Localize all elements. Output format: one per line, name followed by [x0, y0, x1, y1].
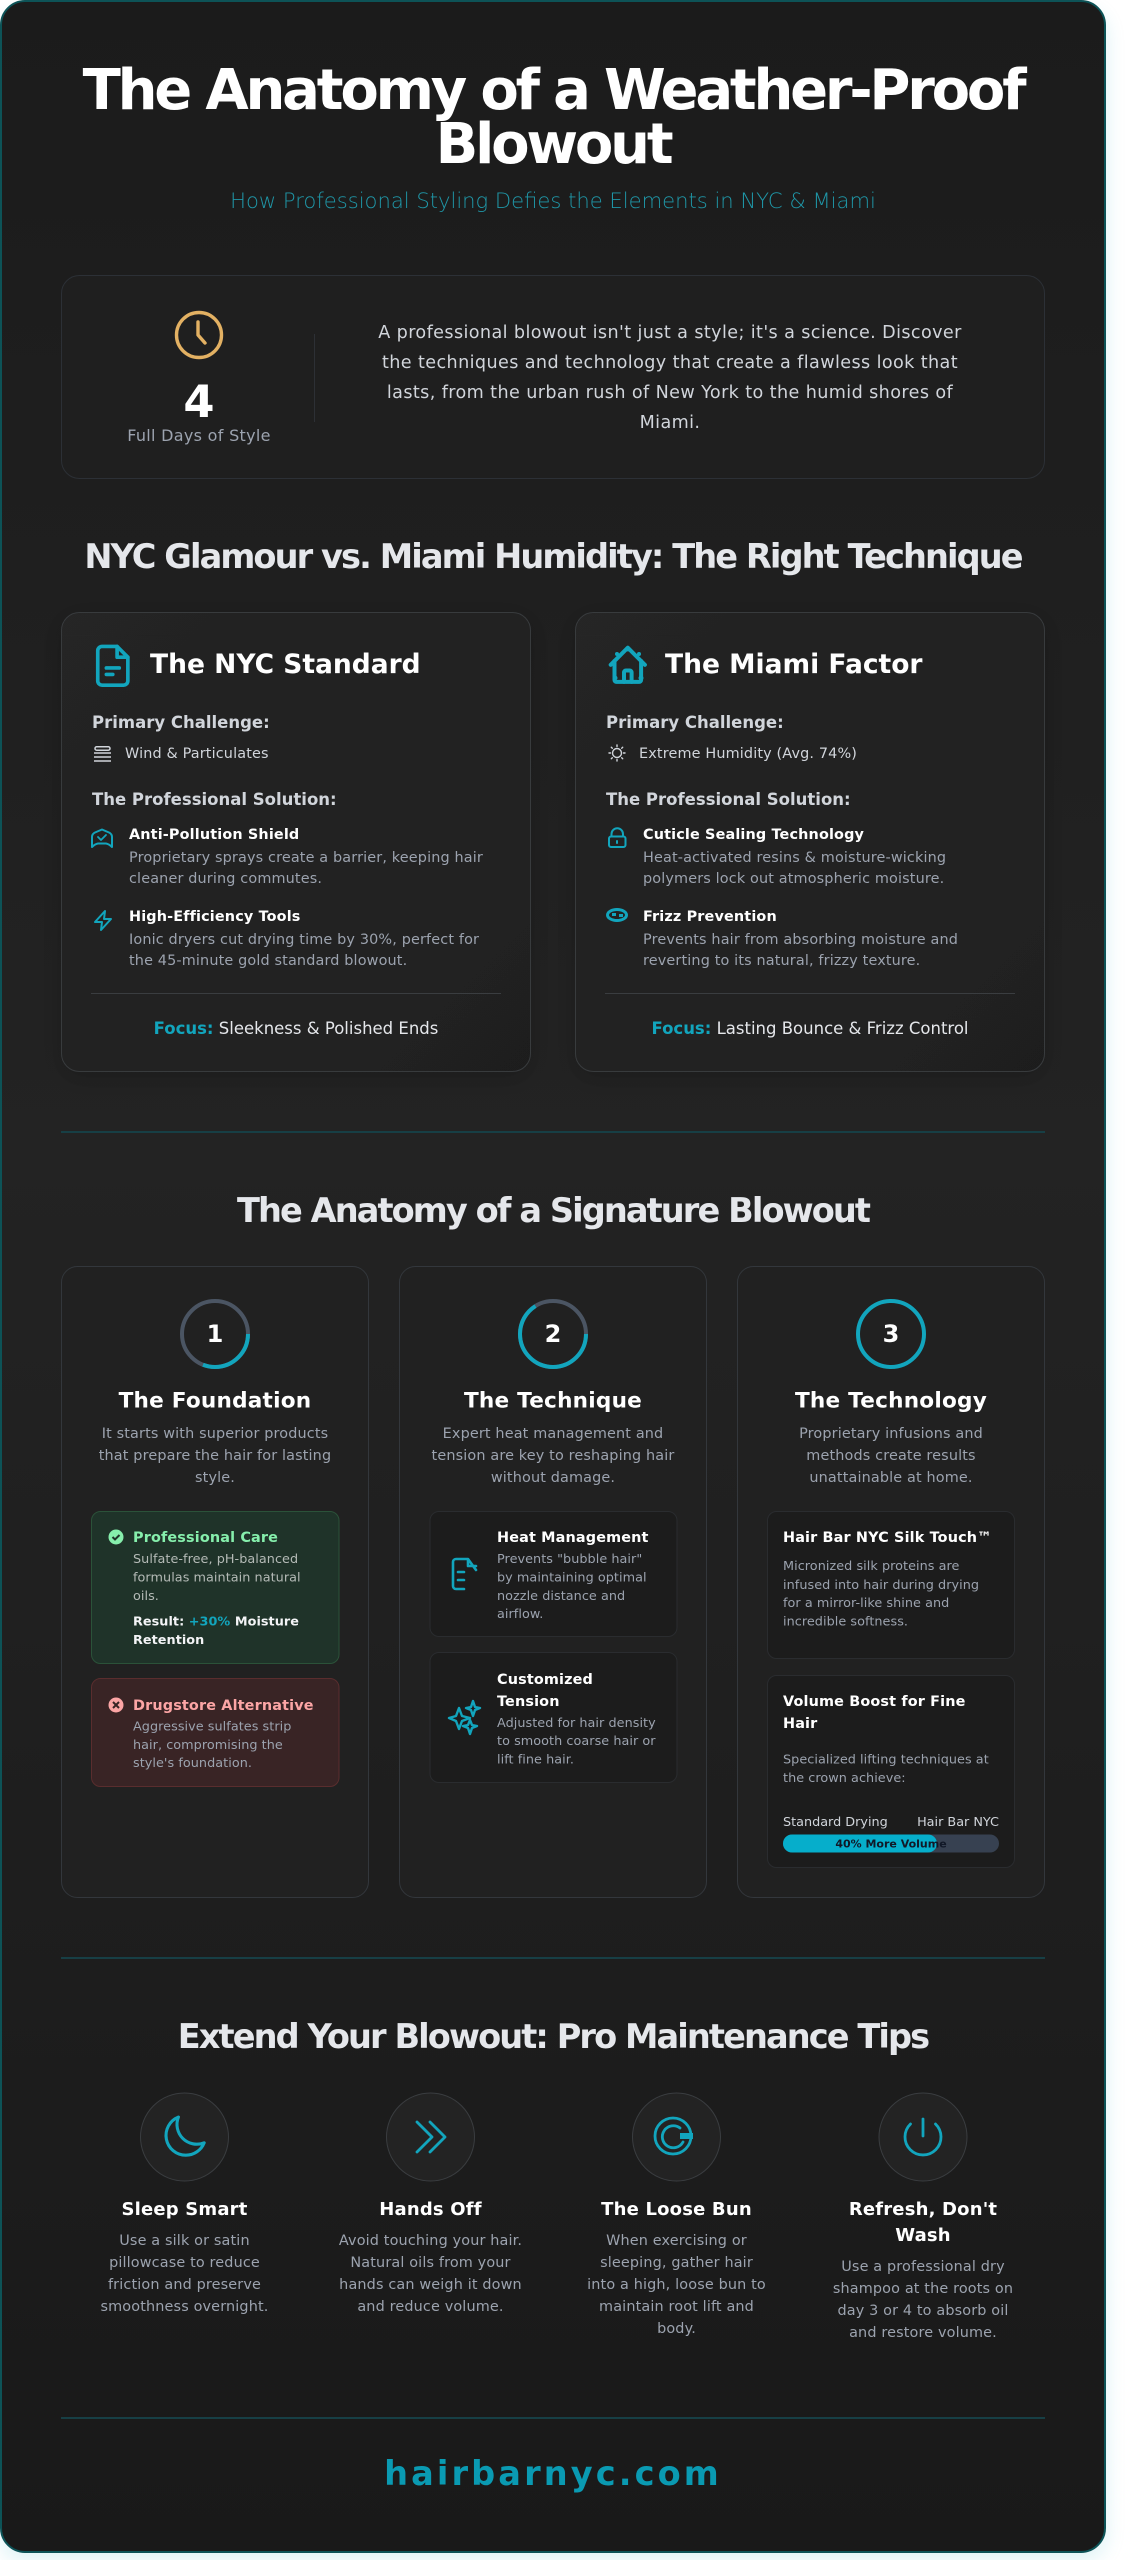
heat management box	[430, 1512, 677, 1636]
step ring 3	[858, 1301, 924, 1367]
tip: loose bun	[587, 2093, 766, 2337]
customized tension box: to smooth coarse hair or	[497, 1734, 656, 1749]
silk touch box	[768, 1512, 1014, 1658]
professional care box: oils.	[133, 1589, 159, 1604]
icon: bun	[632, 2093, 720, 2181]
step description: Expert heat management and	[443, 1426, 663, 1442]
solution: frizz prevention	[608, 909, 958, 969]
stat number: 4	[183, 375, 215, 428]
solution: frizz prevention: Frizz Prevention	[643, 909, 777, 925]
step ring 3: 3	[883, 1320, 899, 1348]
panel: Miami factor	[576, 612, 1044, 1072]
panel: intro stat	[62, 276, 1044, 478]
professional care box: Retention	[133, 1633, 204, 1648]
focus: Focus: Sleekness & Polished Ends	[154, 1019, 438, 1038]
solution label: The Professional Solution:	[606, 790, 851, 809]
step description: that prepare the hair for lasting	[99, 1448, 331, 1464]
solution: cuticle sealing	[609, 827, 946, 887]
tip: hands off: and reduce volume.	[357, 2299, 504, 2315]
icon: sparkles	[449, 1701, 480, 1734]
tip: loose bun: When exercising or	[606, 2233, 747, 2249]
tip: sleep smart	[100, 2093, 269, 2315]
solution: frizz prevention: Prevents hair from absorbing moisture and	[643, 932, 958, 948]
silk touch box: Micronized silk proteins are	[783, 1559, 960, 1574]
solution: anti-pollution shield	[92, 827, 483, 887]
solution: high-efficiency tools: the 45-minute gold standard blowout.	[129, 953, 407, 969]
volume bar	[783, 1834, 999, 1852]
solution: cuticle sealing: polymers lock out atmospheric moisture.	[643, 871, 944, 887]
icon: clock	[176, 312, 222, 358]
tip: hands off	[339, 2093, 522, 2315]
tip: loose bun: sleeping, gather hair	[600, 2255, 753, 2271]
focus: Focus: Lasting Bounce & Frizz Control	[651, 1019, 969, 1038]
intro text: A professional blowout isn't just a style; it's a science. Discover	[378, 323, 962, 343]
tip: sleep smart: friction and preserve	[108, 2277, 261, 2293]
solution label: The Professional Solution:	[92, 790, 337, 809]
icon: wind	[94, 747, 111, 761]
solution: cuticle sealing: Heat-activated resins & moisture-wicking	[643, 850, 946, 866]
step title: The Technology	[795, 1388, 987, 1414]
challenge text: Wind & Particulates	[125, 746, 269, 762]
step title: The Foundation	[119, 1388, 311, 1414]
professional care box: Professional Care	[133, 1530, 278, 1546]
customized tension box	[430, 1652, 677, 1782]
customized tension box: Customized	[497, 1672, 593, 1688]
tip: loose bun: body.	[657, 2321, 696, 2337]
step ring 1	[182, 1301, 248, 1367]
drugstore alternative box: Drugstore Alternative	[133, 1698, 314, 1714]
bar labels: Hair Bar NYC	[917, 1815, 999, 1830]
icon: moon	[140, 2093, 228, 2181]
volume boost box	[768, 1676, 1014, 1868]
drugstore alternative box: Aggressive sulfates strip	[133, 1720, 291, 1734]
professional care box: formulas maintain natural	[133, 1570, 301, 1586]
challenge label: Primary Challenge:	[606, 713, 784, 732]
silk touch box: infused into hair during drying	[783, 1578, 979, 1593]
tip: refresh	[833, 2093, 1013, 2341]
heat management box: Heat Management	[497, 1530, 649, 1546]
step description: without damage.	[491, 1470, 615, 1486]
step ring 1: 1	[207, 1320, 223, 1348]
panel: NYC standard	[62, 612, 530, 1072]
step description: unattainable at home.	[809, 1470, 973, 1486]
drugstore alternative box: style's foundation.	[133, 1756, 252, 1771]
tip: sleep smart: smoothness overnight.	[100, 2299, 269, 2315]
solution: anti-pollution shield: Anti-Pollution Shield	[129, 827, 299, 843]
tip: sleep smart: Sleep Smart	[121, 2199, 248, 2220]
icon: heat document	[453, 1559, 476, 1589]
step description: style.	[195, 1470, 235, 1486]
step description	[99, 1426, 331, 1486]
icon: house	[611, 646, 645, 682]
drugstore alternative box	[92, 1678, 339, 1786]
icon: power	[879, 2093, 967, 2181]
tip: refresh: day 3 or 4 to absorb oil	[837, 2303, 1009, 2319]
intro text: lasts, from the urban rush of New York to the humid shores of	[387, 383, 954, 403]
panel: step 3 technology	[738, 1266, 1044, 1898]
solution: high-efficiency tools: Ionic dryers cut drying time by 30%, perfect for	[129, 932, 479, 948]
solution: anti-pollution shield: Proprietary sprays create a barrier, keeping hair	[129, 850, 483, 866]
icon: sun	[609, 745, 625, 761]
tip: hands off: Hands Off	[379, 2199, 482, 2220]
solution: cuticle sealing: Cuticle Sealing Technology	[643, 827, 865, 843]
challenge text: Extreme Humidity (Avg. 74%)	[639, 746, 857, 762]
footer: website: hairbarnyc.com	[384, 2454, 722, 2493]
panel: step 1 foundation	[62, 1266, 368, 1898]
volume bar: 40% More Volume	[835, 1838, 947, 1850]
tip: refresh: Wash	[895, 2225, 951, 2246]
volume boost box: the crown achieve:	[783, 1771, 906, 1786]
subtitle: How Professional Styling Defies the Elements in NYC & Miami	[230, 188, 876, 213]
icon: check	[108, 1530, 124, 1544]
solution: frizz prevention: reverting to its natural, frizzy texture.	[643, 953, 920, 969]
silk touch box: Hair Bar NYC Silk Touch™	[783, 1530, 992, 1546]
title: Blowout	[436, 112, 673, 177]
customized tension box: Adjusted for hair density	[497, 1716, 656, 1731]
intro text	[378, 323, 962, 433]
heat management box: by maintaining optimal	[497, 1570, 647, 1586]
step description: tension are key to reshaping hair	[432, 1448, 674, 1464]
icon: document	[98, 646, 128, 685]
tip: refresh: shampoo at the roots on	[833, 2281, 1013, 2297]
heat management box: nozzle distance and	[497, 1589, 625, 1604]
drugstore alternative box: hair, compromising the	[133, 1738, 283, 1753]
intro text: Miami.	[640, 413, 700, 433]
tip: loose bun: The Loose Bun	[601, 2199, 752, 2220]
intro text: the techniques and technology that create a flawless look that	[382, 353, 958, 373]
tip: refresh: Refresh, Don't	[849, 2199, 997, 2220]
tip: loose bun: maintain root lift and	[599, 2299, 754, 2315]
step description	[799, 1426, 983, 1486]
volume boost box: Specialized lifting techniques at	[783, 1752, 989, 1768]
step description: It starts with superior products	[102, 1426, 328, 1442]
customized tension box: Tension	[497, 1694, 560, 1710]
silk touch box: incredible softness.	[783, 1614, 908, 1630]
heat management box: Prevents "bubble hair"	[497, 1552, 642, 1567]
solution: high-efficiency tools: High-Efficiency Tools	[129, 909, 300, 925]
step description: Proprietary infusions and	[799, 1426, 983, 1442]
professional care box: Result: +30% Moisture	[133, 1614, 299, 1630]
step ring 2: 2	[545, 1320, 561, 1348]
step description: methods create results	[806, 1448, 976, 1464]
professional care box: Sulfate-free, pH-balanced	[133, 1552, 298, 1567]
challenge label: Primary Challenge:	[92, 713, 270, 732]
step description	[432, 1426, 674, 1486]
silk touch box: for a mirror-like shine and	[783, 1596, 949, 1611]
icon: chevrons	[386, 2093, 474, 2181]
stat label: Full Days of Style	[127, 426, 271, 445]
volume boost box: Volume Boost for Fine	[783, 1694, 966, 1710]
tip: loose bun: into a high, loose bun to	[587, 2277, 766, 2293]
step title: The Technique	[464, 1388, 642, 1414]
professional care box	[92, 1512, 339, 1664]
tip: refresh: and restore volume.	[849, 2325, 997, 2341]
heading: anatomy: The Anatomy of a Signature Blowout	[237, 1191, 871, 1230]
customized tension box: lift fine hair.	[497, 1752, 574, 1768]
step ring 2	[520, 1301, 586, 1367]
heat management box: airflow.	[497, 1607, 543, 1622]
bar labels	[783, 1815, 999, 1830]
title: The Anatomy of a Weather-Proof	[83, 58, 1027, 123]
tip: sleep smart: pillowcase to reduce	[109, 2255, 260, 2271]
tip: hands off: hands can weigh it down	[339, 2277, 522, 2293]
bar labels: Standard Drying	[783, 1815, 888, 1830]
title	[83, 58, 1027, 177]
solution: high-efficiency tools	[95, 909, 479, 969]
solution: anti-pollution shield: cleaner during commutes.	[129, 871, 322, 887]
tip: hands off: Avoid touching your hair.	[339, 2233, 522, 2249]
panel: step 2 technique	[400, 1266, 706, 1898]
volume boost box: Hair	[783, 1716, 818, 1732]
tip: refresh: Use a professional dry	[841, 2259, 1005, 2275]
tip: sleep smart: Use a silk or satin	[119, 2233, 250, 2249]
tip: hands off: Natural oils from your	[350, 2255, 511, 2271]
card title: The Miami Factor	[665, 649, 922, 680]
heading: maintenance: Extend Your Blowout: Pro Maintenance Tips	[178, 2017, 929, 2056]
card title: The NYC Standard	[150, 649, 421, 680]
icon: x	[108, 1698, 124, 1712]
heading: comparison: NYC Glamour vs. Miami Humidity: The Right Technique	[84, 537, 1023, 576]
